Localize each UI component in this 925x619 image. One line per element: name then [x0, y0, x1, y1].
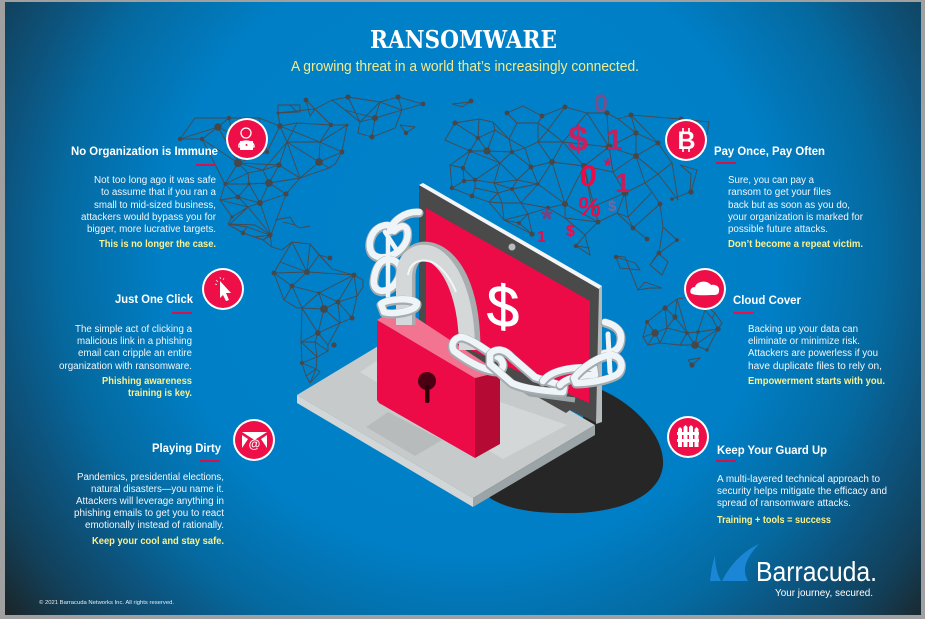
body text: small to mid-sized business, [94, 200, 216, 211]
title: RANSOMWARE [370, 25, 557, 54]
icon: email [233, 419, 275, 461]
wordmark: Barracuda. [756, 556, 877, 587]
highlight [102, 376, 192, 399]
body text: malicious link in a phishing [77, 336, 192, 347]
heading: Pay Once, Pay Often [714, 146, 825, 158]
body text: to assume that if you ran a [101, 187, 217, 198]
highlight: training is key. [128, 388, 192, 399]
highlight: Training + tools = success [717, 515, 831, 526]
floating money symbols: $ [608, 198, 617, 215]
laptop illustration [297, 183, 622, 507]
floating money symbols: 1 [615, 168, 630, 198]
body text: possible future attacks. [728, 224, 828, 235]
heading: Cloud Cover [733, 295, 802, 307]
highlight: Keep your cool and stay safe. [92, 536, 224, 547]
panel: Pay Once, Pay Often [665, 119, 864, 250]
panel: Cloud Cover [684, 268, 885, 387]
body text: back but as soon as you do, [728, 200, 850, 211]
padlock [377, 251, 500, 458]
floating money symbols: $ [568, 118, 588, 159]
subtitle: A growing threat in a world that’s increasingly connected. [291, 59, 639, 75]
tagline: Your journey, secured. [775, 587, 873, 599]
body text [748, 324, 882, 372]
body text: eliminate or minimize risk. [748, 336, 860, 347]
body text: A multi-layered technical approach to [717, 474, 880, 485]
panel: No Organization is Immune [71, 118, 268, 250]
body text: Not too long ago it was safe [94, 175, 216, 186]
body text [717, 474, 887, 509]
body text [59, 324, 193, 372]
body text: ransom to get your files [728, 187, 831, 198]
body text: email can cripple an entire [78, 348, 192, 359]
laptop base [297, 322, 595, 507]
highlight: Phishing awareness [102, 376, 192, 387]
icon: cursor [202, 268, 244, 310]
body text [74, 472, 224, 531]
highlight: This is no longer the case. [99, 239, 216, 250]
body text: phishing emails to get you to react [74, 508, 224, 519]
floating money symbols: 1 [537, 229, 546, 246]
body text: organization with ransomware. [59, 361, 192, 372]
icon: shark fins [710, 544, 759, 581]
body text: Attackers are powerless if you [748, 348, 878, 359]
rule [196, 164, 216, 166]
body text: bigger, more lucrative targets. [87, 224, 216, 235]
laptop shadow [480, 387, 663, 513]
icon: bitcoin: B [677, 127, 696, 155]
heading: Keep Your Guard Up [717, 445, 827, 457]
body text: Backing up your data can [748, 324, 858, 335]
body text: have duplicate files to rely on, [748, 361, 882, 372]
floating money symbols: * [604, 156, 612, 177]
body text: your organization is marked for [728, 212, 864, 223]
body text: natural disasters—you name it. [91, 484, 224, 495]
rule [172, 312, 192, 314]
highlight: Empowerment starts with you. [748, 376, 885, 387]
floating money symbols: 0 [578, 159, 598, 194]
body text: spread of ransomware attacks. [717, 498, 851, 509]
world network map [178, 94, 722, 383]
body text: The simple act of clicking a [75, 324, 193, 335]
icon: cloud [684, 268, 726, 310]
heading: Just One Click [115, 294, 194, 306]
laptop screen: $ [487, 273, 519, 341]
panel: Just One Click [59, 268, 244, 399]
panel: Keep Your Guard Up [667, 416, 887, 526]
highlight: Don’t become a repeat victim. [728, 239, 863, 250]
floating money symbols [537, 90, 630, 246]
body text: emotionally instead of rationally. [85, 520, 224, 531]
body text: Attackers will leverage anything in [76, 496, 224, 507]
floating money symbols: 0 [594, 90, 608, 118]
body text: attackers would bypass you for [81, 212, 217, 223]
icon: hacker with laptop [226, 118, 268, 160]
heading: Playing Dirty [152, 443, 222, 455]
floating money symbols: 1 [606, 124, 623, 157]
chain across lock [381, 299, 622, 400]
Barracuda logo [710, 544, 877, 599]
body text: Pandemics, presidential elections, [77, 472, 224, 483]
icon: email: @ [249, 437, 260, 451]
floating money symbols: * [541, 203, 553, 236]
body text [81, 175, 217, 235]
rule [200, 460, 220, 462]
laptop screen [419, 183, 602, 424]
body text: Sure, you can pay a [728, 175, 815, 186]
rule [733, 312, 754, 314]
floating money symbols: $ [566, 223, 575, 240]
rule [716, 460, 736, 462]
panel: Playing Dirty [74, 419, 275, 547]
icon: fence [667, 416, 709, 458]
heading: No Organization is Immune [71, 146, 218, 158]
body text: security helps mitigate the efficacy and [717, 486, 887, 497]
icon: bitcoin [665, 119, 707, 161]
body text [728, 175, 864, 235]
floating money symbols: % [577, 191, 603, 223]
chain behind lock [370, 212, 419, 304]
rule [716, 162, 736, 164]
copyright: © 2021 Barracuda Networks Inc. All rights reserved. [39, 599, 174, 606]
